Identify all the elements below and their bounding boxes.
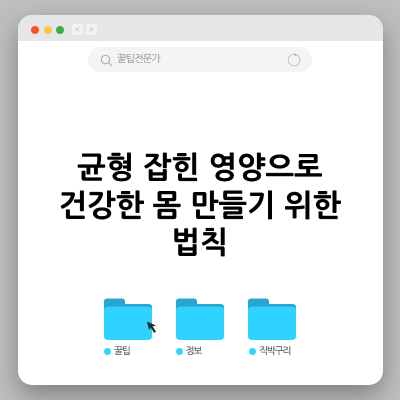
dot: 꿀팁 (104, 348, 111, 355)
folder: 꿀팁 (104, 298, 152, 340)
title bar (18, 15, 384, 41)
title (59, 152, 341, 260)
folder: 직박구리 (248, 298, 296, 340)
dot: 직박구리 (248, 348, 256, 355)
icon: cursor (147, 322, 156, 333)
label: 정보: 정보 (186, 346, 201, 356)
forward button: > (89, 25, 94, 34)
label: 꿀팁: 꿀팁 (114, 346, 130, 356)
dot: 정보 (176, 348, 182, 355)
folder: 정보 (176, 298, 224, 340)
icon: search (100, 54, 112, 66)
back button (72, 24, 83, 35)
icon: reload (288, 54, 300, 66)
title: 법칙 (172, 227, 228, 260)
window control: yellow (44, 26, 52, 34)
back button: < (75, 25, 80, 34)
window control: red (31, 26, 39, 34)
label: 직박구리: 직박구리 (259, 346, 290, 356)
title: 건강한 몸 만들기 위한 (59, 190, 341, 222)
window control: green (56, 26, 64, 34)
title: 균형 잡힌 영양으로 (77, 152, 323, 185)
search bar (88, 47, 312, 72)
forward button (86, 24, 97, 35)
search text: 꿀팁전문가 (117, 54, 160, 65)
